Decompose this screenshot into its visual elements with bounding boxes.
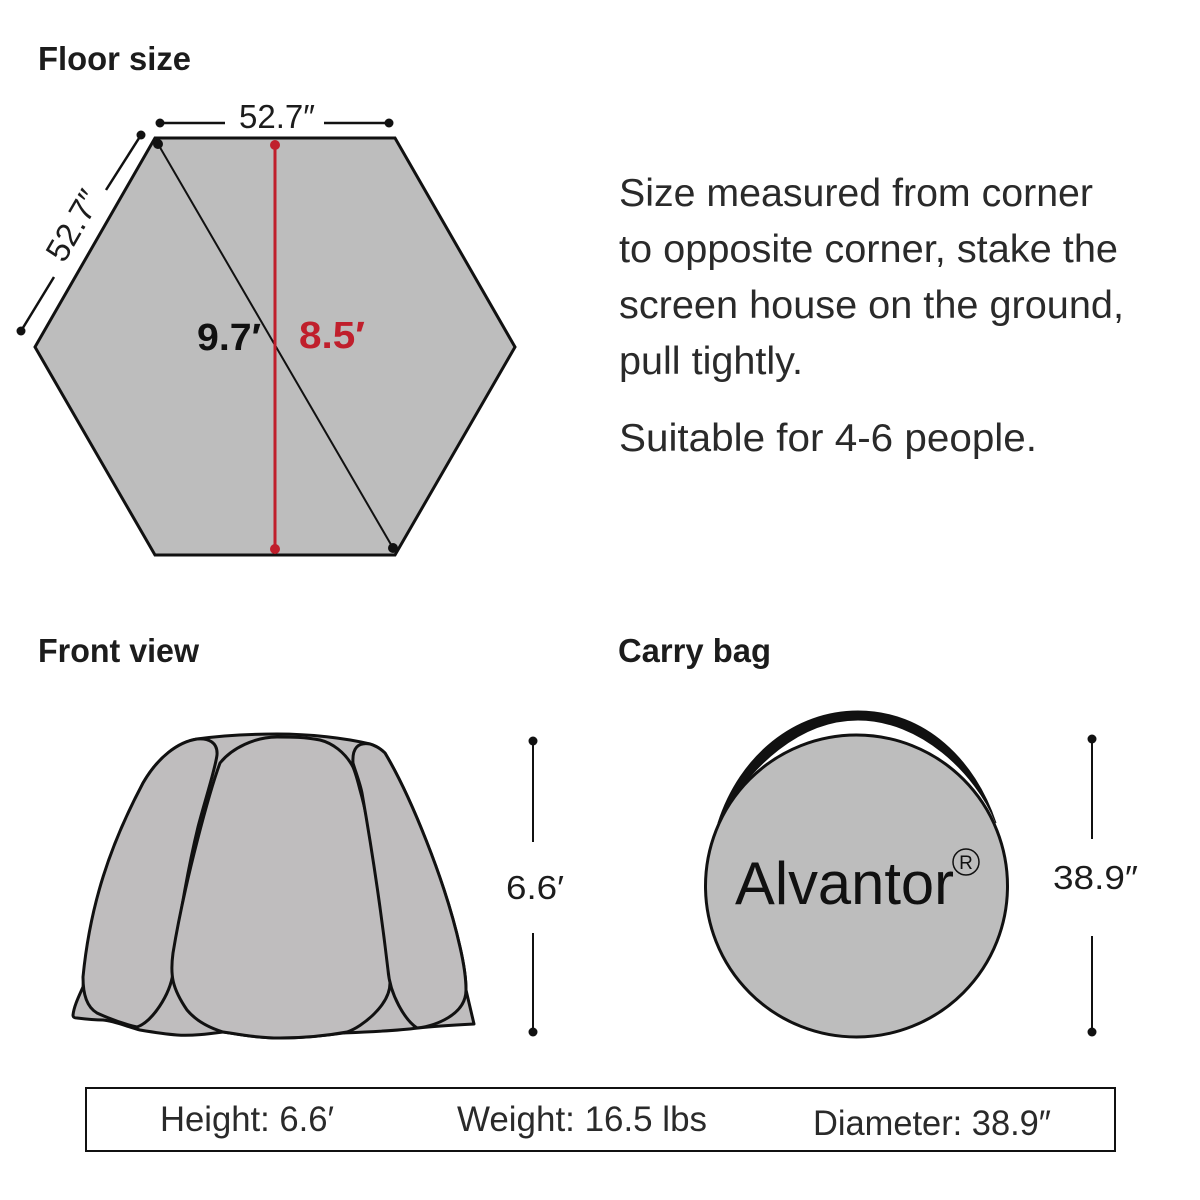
hexagon floor [35, 138, 515, 555]
heading: floor size: Floor size [38, 40, 191, 77]
description text: Size measured from corner [619, 172, 1093, 215]
heading: front view: Front view [38, 632, 199, 669]
left side dimension: 52.7″ [38, 183, 108, 268]
registered mark [953, 849, 979, 875]
description text [619, 172, 1124, 460]
carry bag icon [706, 711, 1008, 1037]
bag body [706, 735, 1008, 1037]
bag brand: Alvantor [735, 850, 954, 917]
center panel [172, 737, 390, 1038]
bag handle [718, 711, 996, 823]
height dimension: carry bag: 38.9″ [1053, 859, 1138, 896]
height spec: Height: 6.6′ [160, 1100, 334, 1139]
registered mark: R [959, 853, 973, 874]
floor plan diagram [16, 98, 515, 555]
summary box [86, 1088, 1115, 1151]
left panel [83, 739, 217, 1027]
left side dimension [16, 130, 146, 336]
corner-to-corner diagonal [153, 139, 398, 553]
description text: to opposite corner, stake the [619, 228, 1118, 271]
side-to-side red measure [270, 140, 280, 554]
heading: carry bag: Carry bag [618, 632, 771, 669]
label: width 8.5: 8.5′ [299, 315, 365, 357]
height dimension: front view: 6.6′ [506, 869, 564, 906]
front view tent [73, 734, 474, 1038]
height dimension: front view [506, 736, 564, 1036]
diameter spec: Diameter: 38.9″ [813, 1104, 1051, 1143]
description text: Suitable for 4-6 people. [619, 417, 1037, 460]
height dimension: carry bag [1053, 734, 1138, 1036]
top side dimension [156, 98, 394, 135]
right panel [353, 744, 466, 1028]
description text: pull tightly. [619, 340, 803, 383]
label: diagonal 9.7: 9.7′ [197, 317, 261, 359]
description text: screen house on the ground, [619, 284, 1124, 327]
weight spec: Weight: 16.5 lbs [457, 1100, 707, 1139]
tent outline [73, 734, 474, 1038]
top side dimension: 52.7″ [239, 98, 315, 135]
